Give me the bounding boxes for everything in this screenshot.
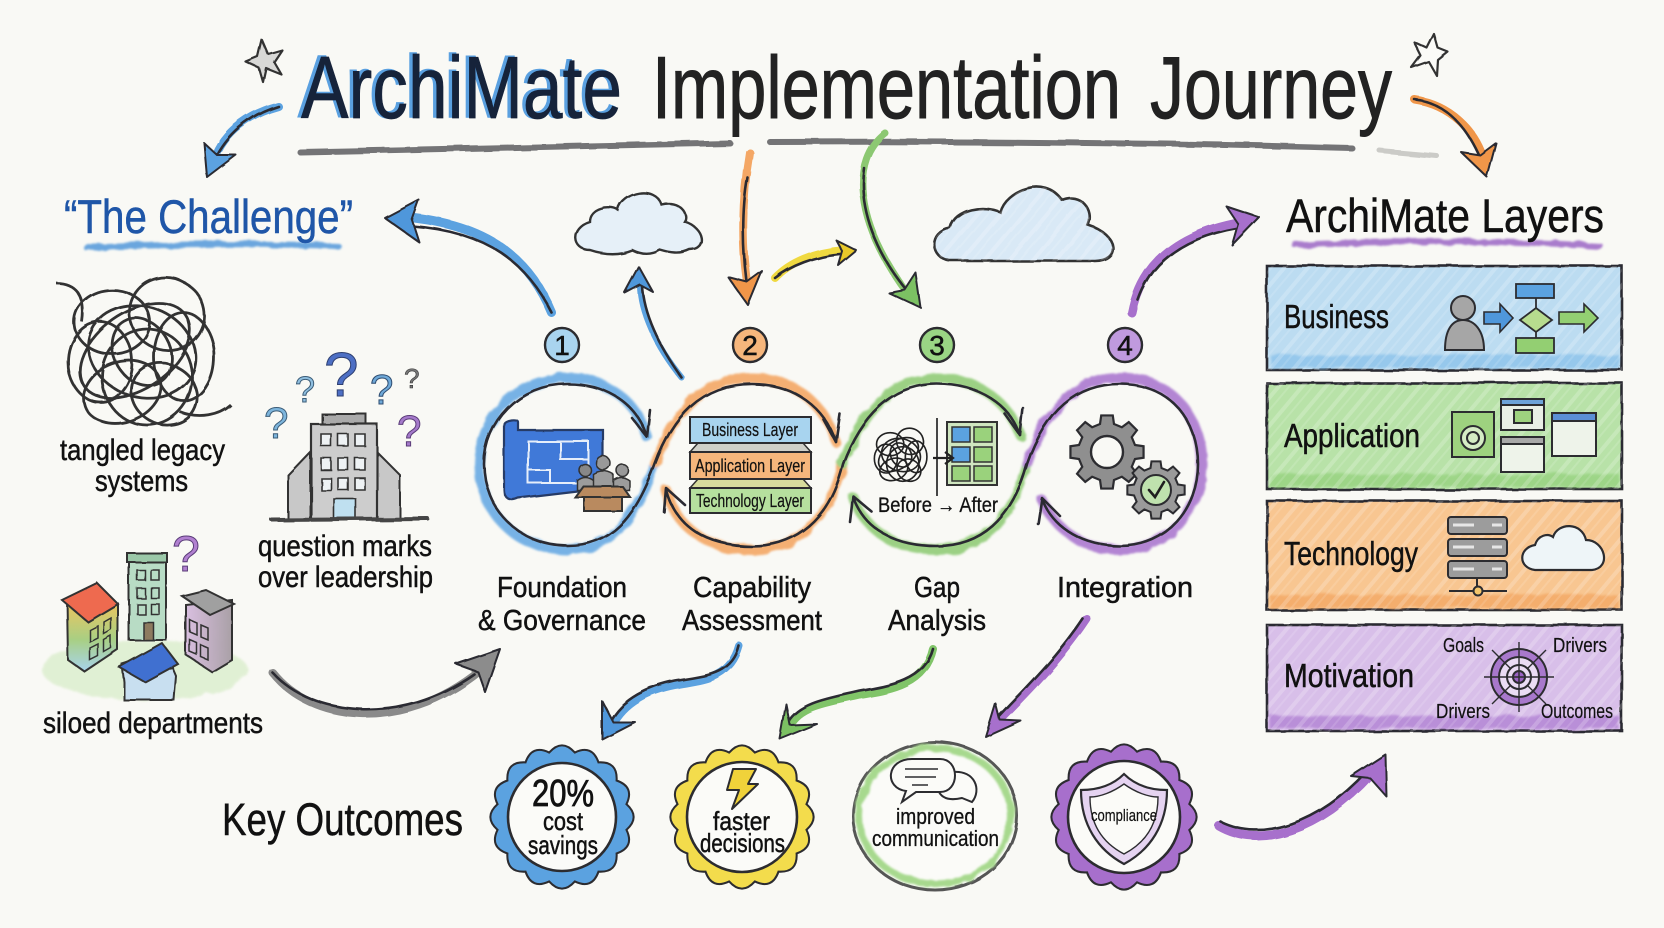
step 2 (682, 328, 822, 637)
arrow: yellow connector (775, 240, 856, 278)
icon: layer stack: Business Layer (702, 420, 798, 440)
label: foundation and governance: Foundation (497, 572, 627, 604)
title: Implementation (652, 38, 1121, 137)
arrow: challenge to foundation (273, 649, 500, 714)
badge: faster decisions: decisions (700, 828, 785, 858)
label: question marks over leadership (258, 530, 433, 594)
title underline (300, 142, 1437, 156)
loop ink line (484, 384, 1198, 546)
badge: faster decisions: faster (713, 806, 770, 836)
icon: layer stack: Application Layer (695, 456, 805, 476)
title: ArchiMate (301, 38, 622, 137)
label: capability assessment: Assessment (682, 605, 822, 637)
icon: target (1484, 642, 1554, 712)
number badge 4: 4 (1117, 330, 1133, 361)
label: capability assessment (682, 572, 822, 637)
layer: motivation (1267, 625, 1622, 731)
title: Journey (1150, 38, 1392, 137)
badge: improved communication (853, 742, 1017, 890)
badge: cost savings: savings (528, 830, 598, 860)
icon: before and after: Before → After (878, 494, 998, 517)
icon: question marks: ? (397, 407, 421, 456)
labels: motivation terms (1436, 635, 1613, 723)
heading: the challenge: “The Challenge” (64, 190, 353, 243)
icon: star right (1412, 34, 1448, 76)
icon: question marks: ? (324, 341, 358, 410)
layer: application: Application (1284, 417, 1420, 454)
layer: business: Business (1284, 298, 1389, 335)
number badge 2: 2 (742, 330, 758, 361)
label: foundation and governance: & Governance (478, 605, 646, 637)
icon: question marks: ? (404, 363, 420, 394)
badge: cost savings: cost (543, 806, 584, 836)
labels: motivation terms: Goals (1443, 635, 1484, 657)
panel: tangled legacy systems (56, 264, 231, 498)
icon: business process (1445, 284, 1598, 353)
icon: speech bubbles (891, 759, 976, 802)
label: gap analysis (888, 572, 986, 637)
icon: gears (1070, 415, 1185, 519)
layer: technology (1267, 501, 1622, 610)
icon: lightning bolt (727, 769, 758, 809)
number badge 1: 1 (554, 330, 570, 361)
icon: cloud large (934, 187, 1113, 261)
icon: siloed buildings (42, 526, 248, 700)
number badge 3 (920, 328, 954, 362)
badge: cost savings (490, 745, 634, 889)
icon: cloud small (576, 193, 702, 254)
arrow: title to step 3 (862, 133, 921, 308)
panel: journey loops (478, 328, 1202, 637)
arrow: title to step 2 (728, 153, 762, 305)
badge: compliance (1051, 744, 1197, 890)
icon: office building (272, 414, 428, 520)
loop colour washes (479, 378, 1202, 550)
label: integration: Integration (1057, 572, 1193, 604)
icon: before and after (872, 418, 998, 517)
arrow: title to challenge (204, 106, 278, 177)
arrow: step 2 to cloud (625, 267, 682, 378)
layer: motivation: Motivation (1284, 657, 1414, 694)
panel: question marks over leadership (258, 341, 433, 594)
icon: layer stack (690, 417, 811, 513)
arrow: step 1 to challenge (385, 200, 552, 313)
label: question marks over leadership: question marks (258, 530, 432, 563)
label: gap analysis: Gap (914, 572, 960, 604)
layer: business (1267, 266, 1622, 370)
heading: key outcomes: Key Outcomes (222, 794, 463, 845)
badge: improved communication: communication (872, 826, 999, 851)
arrow: step 4 to layers (1132, 206, 1259, 313)
arrow: gap analysis to faster decisions (780, 649, 933, 739)
label: tangled legacy systems: tangled legacy (60, 434, 225, 467)
layer: application (1267, 383, 1622, 489)
panel: layers stack (1267, 266, 1622, 731)
step 4 (1057, 328, 1193, 604)
number badge 3: 3 (929, 330, 945, 361)
icon: question marks: ? (295, 369, 315, 410)
step 1 (478, 328, 646, 637)
arrow: integration to communication (986, 619, 1087, 737)
label: tangled legacy systems (60, 434, 225, 498)
label: gap analysis: Analysis (888, 605, 986, 637)
icon: question marks: ? (370, 366, 393, 413)
heading: archimate layers: ArchiMate Layers (1286, 189, 1604, 242)
label: foundation and governance (478, 572, 646, 637)
number badge 2 (733, 328, 767, 362)
panel: siloed departments (42, 526, 263, 740)
icon: question marks: ? (264, 399, 288, 448)
badge: improved communication: improved (896, 804, 975, 829)
icon: technology cloud (1522, 526, 1604, 570)
badge: faster decisions (670, 745, 814, 889)
arrow: title to layers (1415, 100, 1496, 177)
icon: star left (246, 40, 282, 82)
badge: compliance: compliance (1091, 806, 1157, 825)
icon: servers (1448, 517, 1507, 596)
icon: blueprint and meeting (504, 420, 630, 511)
icon: shield (1081, 774, 1167, 864)
step 3 (872, 328, 998, 637)
title: ArchiMate (298, 37, 619, 136)
label: tangled legacy systems: systems (95, 465, 188, 498)
labels: motivation terms: Drivers (1436, 701, 1490, 723)
title (298, 37, 1392, 137)
label: question marks over leadership: over leadership (258, 561, 433, 594)
number badge 4 (1108, 328, 1142, 362)
arrow: capability to cost savings (602, 646, 739, 739)
label: capability assessment: Capability (693, 572, 811, 604)
icon: question marks (264, 341, 421, 456)
icon: layer stack: Technology Layer (696, 491, 804, 511)
labels: motivation terms: Outcomes (1541, 701, 1613, 723)
badge: cost savings: 20% (532, 773, 594, 815)
icon: tangle (56, 264, 231, 437)
icon: application windows (1452, 399, 1596, 472)
label: siloed departments: siloed departments (43, 707, 263, 740)
number badge 1 (545, 328, 579, 362)
arrow: outcomes to layers (1219, 754, 1386, 836)
labels: motivation terms: Drivers (1553, 635, 1607, 657)
icon: siloed buildings: ? (172, 526, 200, 582)
layer: technology: Technology (1284, 535, 1418, 572)
